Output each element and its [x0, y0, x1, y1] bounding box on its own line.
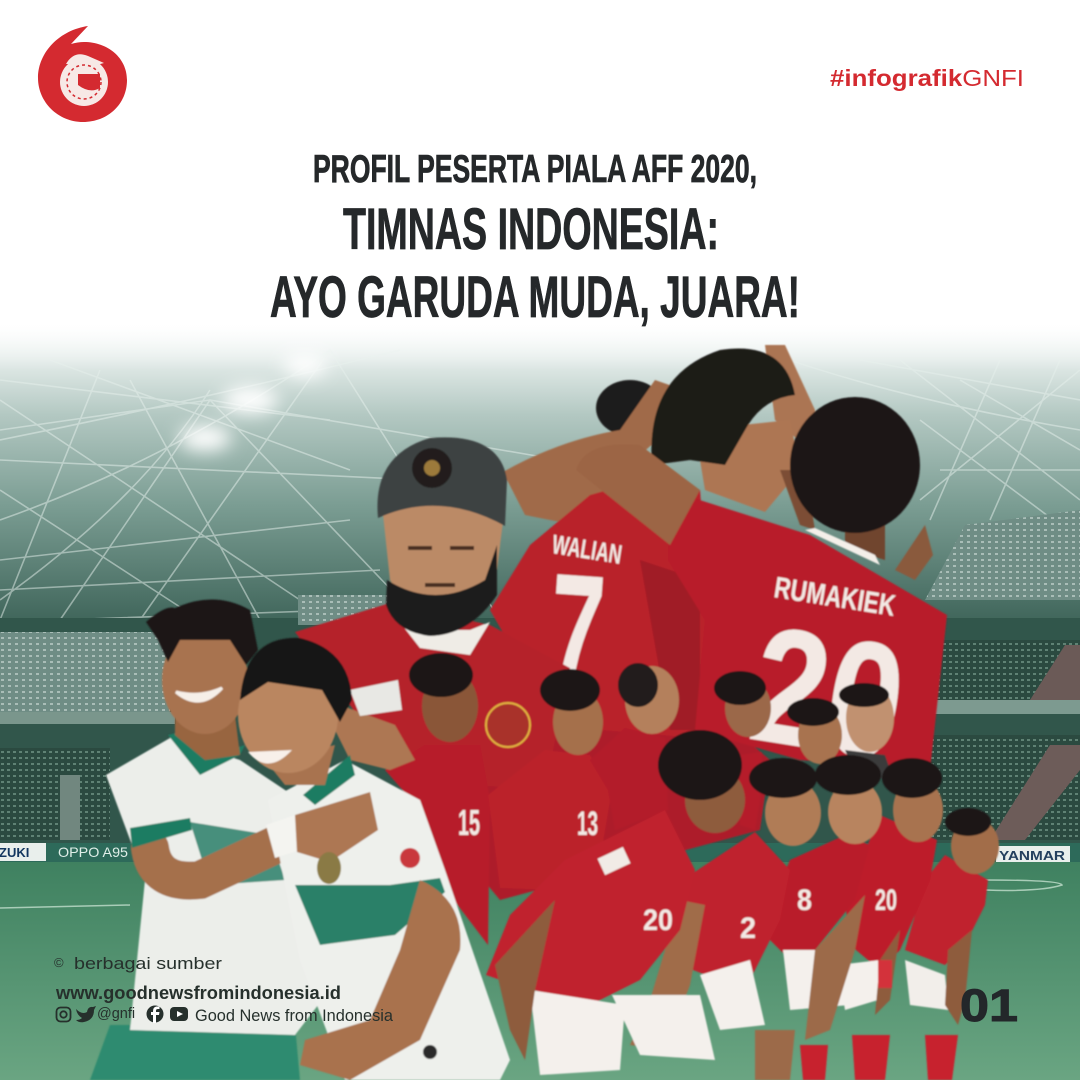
sweatband [266, 815, 300, 858]
player 15 [385, 653, 490, 945]
emblem [317, 852, 341, 884]
head [162, 626, 248, 734]
player 13: 13 [577, 805, 598, 843]
player 15: 15 [458, 802, 480, 843]
coach mask [386, 545, 497, 636]
icon: facebook [146, 1006, 164, 1023]
player behind right 2 [787, 698, 842, 764]
title [270, 148, 800, 330]
white fade behind title [0, 300, 1080, 370]
logo GNFI [38, 26, 127, 122]
player behind, tall [590, 663, 679, 830]
source credit: berbagai sumber [74, 955, 223, 973]
handle: @gnfi [97, 1006, 135, 1022]
page name: Good News from Indonesia [195, 1006, 394, 1025]
icon: youtube [170, 1007, 188, 1021]
jersey patch [400, 848, 420, 868]
head [238, 657, 338, 773]
hair [146, 599, 258, 665]
players celebrating in the back [400, 345, 947, 900]
jersey number 20: 20 [740, 591, 916, 796]
icon: instagram [56, 1008, 70, 1022]
player front crouching [486, 730, 745, 1075]
coach face [382, 505, 505, 625]
player behind right 1 [714, 671, 771, 830]
player Rumakiek head [780, 397, 920, 560]
icon: twitter [76, 1006, 96, 1022]
crest on shorts [423, 1045, 437, 1059]
player Walian jersey [490, 478, 720, 740]
hashtag: #infografik GNFI [830, 65, 1024, 91]
jersey crest [486, 703, 530, 747]
arm over shoulder [576, 444, 700, 545]
player far right [905, 808, 999, 1025]
green band [295, 878, 445, 945]
smile [248, 750, 292, 764]
collar [303, 755, 355, 805]
sleeve trim [130, 818, 192, 848]
coach jersey [295, 603, 570, 790]
hand on back [295, 792, 378, 862]
jersey name RUMAKIEK: RUMAKIEK [772, 571, 898, 623]
sleeve on shoulder [350, 680, 402, 716]
title line 3: AYO GARUDA MUDA, JUARA! [270, 265, 800, 330]
player behind right 3 [839, 683, 894, 785]
stadium floodlights [179, 353, 327, 451]
title line 2: TIMNAS INDONESIA: [343, 197, 719, 262]
player number 2 [630, 758, 821, 1050]
football pitch [0, 862, 1080, 1080]
smile [176, 688, 222, 701]
middle row players [385, 653, 894, 945]
jersey [106, 738, 322, 1035]
front player in white jersey [238, 638, 510, 1080]
left player in white jersey [90, 599, 415, 1080]
right arm [300, 880, 460, 1080]
player front crouching: 20 [643, 904, 673, 937]
coach collar [392, 612, 490, 655]
page number: 01 [960, 980, 1018, 1031]
player number 20: 20 [875, 884, 897, 917]
all players [90, 345, 999, 1080]
hand on shoulder [335, 705, 415, 770]
player Walian head [651, 348, 800, 512]
stadium background photo [0, 325, 1080, 863]
hand on head [765, 345, 815, 450]
advertising boards: YANMAR [999, 848, 1066, 863]
player Rumakiek jersey [668, 490, 947, 770]
advertising boards [0, 843, 1080, 863]
advertising boards: OPPO A95 [58, 844, 128, 860]
player number 2: 2 [740, 912, 756, 945]
jersey number 7: 7 [542, 537, 610, 733]
jersey name WALIAN: WALIAN [550, 529, 624, 570]
front row legs [852, 1035, 890, 1080]
player 4 shorts and legs [905, 960, 948, 1010]
collar [168, 733, 245, 775]
coach eyes and mouth [408, 548, 474, 585]
jersey [268, 760, 510, 1080]
player number 8: 8 [797, 884, 812, 917]
social media row [56, 1006, 394, 1025]
player 13 [488, 669, 612, 890]
front row players [486, 730, 999, 1080]
arm [150, 838, 290, 881]
arm hugging [503, 380, 698, 525]
neck [175, 715, 240, 760]
chest stripe [190, 822, 285, 885]
title line 1: PROFIL PESERTA PIALA AFF 2020, [313, 148, 757, 191]
website url: www.goodnewsfromindonesia.id [55, 983, 341, 1003]
player number 20 [838, 758, 943, 1015]
hat emblem [412, 448, 452, 488]
neck [265, 745, 335, 785]
player behind [596, 380, 664, 436]
red filler behind middle row [400, 660, 770, 900]
hair [240, 638, 352, 722]
copyright symbol: © [54, 955, 64, 970]
coach hat [377, 437, 507, 526]
jersey collar [805, 528, 880, 565]
sleeve shadow [640, 560, 700, 730]
player number 8 [760, 755, 882, 1040]
shorts [90, 1025, 300, 1080]
coach Shin Tae-yong [295, 437, 570, 790]
